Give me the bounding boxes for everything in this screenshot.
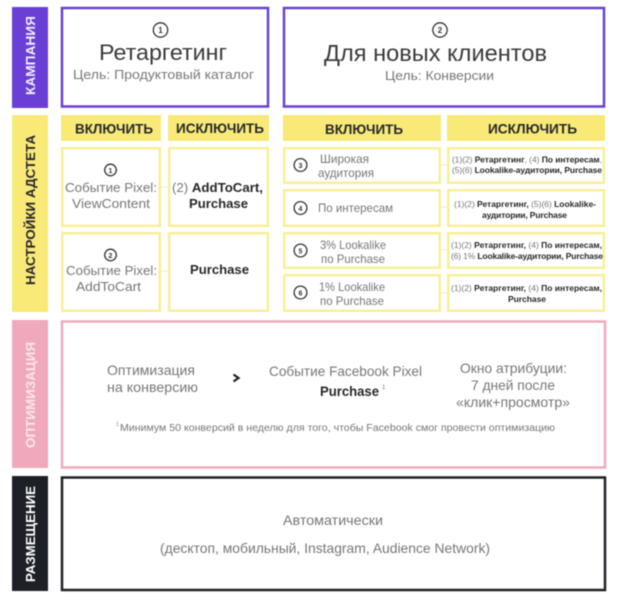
cell: viewcontent: ViewContent xyxy=(72,197,151,211)
cell: exclude addtocart purchase xyxy=(169,148,268,226)
icon: number 1 xyxy=(153,23,168,37)
text: окно атрибуции: 7 дней после xyxy=(471,377,555,393)
header: исключить 2 xyxy=(447,115,605,141)
row 4: исключить: (1)(2) Ретаргетинг, (5)(6) Lookalike- xyxy=(454,199,596,209)
text: окно атрибуции: Окно атрибуции: xyxy=(460,360,567,376)
row 5: 3% lookalike: 5 xyxy=(299,248,303,256)
header: исключить 1 xyxy=(168,115,269,141)
sidebar: кампания xyxy=(12,7,48,108)
row 3: широкая аудитория: Широкая xyxy=(320,152,369,166)
cell: exclude purchase xyxy=(169,233,268,311)
header: включить 2 xyxy=(283,115,441,141)
header: включить 1: ВКЛЮЧИТЬ xyxy=(75,122,153,136)
row 6: 1% lookalike: 1% Lookalike xyxy=(319,280,385,294)
row 3: исключить xyxy=(448,148,604,183)
heading: ретаргетинг: Ретаргетинг xyxy=(99,40,227,65)
row 5: исключить xyxy=(448,233,604,268)
panel: для новых клиентов xyxy=(284,8,604,106)
row 3: широкая аудитория: аудитория xyxy=(318,166,374,180)
text: автоматически: Автоматически xyxy=(283,512,383,528)
text: событие facebook pixel: Purchase xyxy=(320,383,379,399)
sidebar: размещение xyxy=(12,476,48,591)
row 6: 1% lookalike: 6 xyxy=(299,290,303,298)
sidebar: настройки адсета: НАСТРОЙКИ АДСТЕТА xyxy=(23,134,38,285)
header: исключить 2: ИСКЛЮЧИТЬ xyxy=(488,122,577,136)
panel: ретаргетинг xyxy=(62,8,268,106)
header: исключить 1: ИСКЛЮЧИТЬ xyxy=(176,121,264,136)
header: включить 2: ВКЛЮЧИТЬ xyxy=(325,122,403,137)
text: placements: (десктоп, мобильный, Instagram, Audience Network) xyxy=(160,540,490,556)
row 6: исключить xyxy=(448,275,604,311)
goal text: Цель: Продуктовый каталог xyxy=(73,67,254,82)
row 4: исключить: аудитории, Purchase xyxy=(482,210,567,220)
header: включить 1 xyxy=(61,115,161,141)
row 6: 1% lookalike xyxy=(284,275,440,311)
row 5: 3% lookalike xyxy=(284,233,440,268)
icon: chevron arrow xyxy=(234,374,238,382)
panel: размещение xyxy=(62,478,605,590)
text: событие facebook pixel xyxy=(269,363,422,399)
cell: addtocart: 2 xyxy=(109,253,113,260)
row 6: исключить: (1)(2) Ретаргетинг, (4) По интересам, xyxy=(451,283,602,293)
cell: addtocart: AddToCart xyxy=(76,280,142,294)
cell: exclude addtocart purchase: (2) AddToCart, xyxy=(172,181,263,195)
row 5: 3% lookalike: по Purchase xyxy=(321,252,385,266)
text: событие facebook pixel: Событие Facebook Pixel xyxy=(269,363,422,379)
row 4: по интересам: 4 xyxy=(299,206,303,213)
heading: для новых клиентов: Для новых клиентов xyxy=(324,40,547,66)
text: оптимизация на конверсию: Оптимизация xyxy=(107,362,195,378)
row 3: исключить: (5)(6) Lookalike-аудитории, Purchase xyxy=(452,165,602,175)
sidebar: кампания: КАМПАНИЯ xyxy=(23,16,38,95)
text: оптимизация на конверсию: на конверсию xyxy=(107,379,198,395)
text: оптимизация на конверсию xyxy=(107,362,198,395)
row 5: исключить: (6) 1% Lookalike-аудитории, Purchase xyxy=(451,251,603,261)
icon: number 1: 1 xyxy=(158,26,163,35)
cell: viewcontent xyxy=(62,148,160,226)
row 3: широкая аудитория xyxy=(284,148,440,183)
text: окно атрибуции xyxy=(456,360,570,410)
row 6: исключить: Purchase xyxy=(508,294,546,304)
cell: exclude purchase: Purchase xyxy=(190,263,249,277)
cell: exclude addtocart purchase: Purchase xyxy=(189,197,248,211)
icon: number 2 xyxy=(433,23,447,37)
row 5: 3% lookalike: 3% Lookalike xyxy=(320,238,386,252)
row 3: исключить: (1)(2) Ретаргетинг, (4) По интересам, xyxy=(452,154,602,164)
cell: addtocart xyxy=(62,233,160,311)
cell: addtocart: Событие Pixel: xyxy=(66,264,157,278)
sidebar: настройки адсета xyxy=(12,115,48,312)
row 5: исключить: (1)(2) Ретаргетинг, (4) По интересам, xyxy=(451,240,602,250)
cell: viewcontent: Событие Pixel: xyxy=(65,181,157,195)
sidebar: размещение: РАЗМЕЩЕНИЕ xyxy=(23,486,38,582)
sidebar: оптимизация xyxy=(12,320,48,468)
icon: number 2: 2 xyxy=(438,26,443,35)
row 4: по интересам: По интересам xyxy=(318,201,393,215)
footnote: 1 xyxy=(116,422,119,428)
goal text: Цель: Конверсии xyxy=(385,68,494,83)
cell: viewcontent: 1 xyxy=(109,168,113,175)
panel: оптимизация xyxy=(62,322,605,468)
row 4: по интересам xyxy=(284,190,440,226)
footnote: Минимум 50 конверсий в неделю для того, чтобы Facebook смог провести оптимизацию xyxy=(120,422,556,434)
sidebar: оптимизация: ОПТИМИЗАЦИЯ xyxy=(23,342,38,448)
row 6: 1% lookalike: по Purchase xyxy=(320,294,384,308)
row 4: исключить xyxy=(448,190,604,226)
row 3: широкая аудитория: 3 xyxy=(299,163,303,170)
text: событие facebook pixel: 1 xyxy=(382,385,386,391)
text: окно атрибуции: «клик+просмотр» xyxy=(456,394,570,410)
